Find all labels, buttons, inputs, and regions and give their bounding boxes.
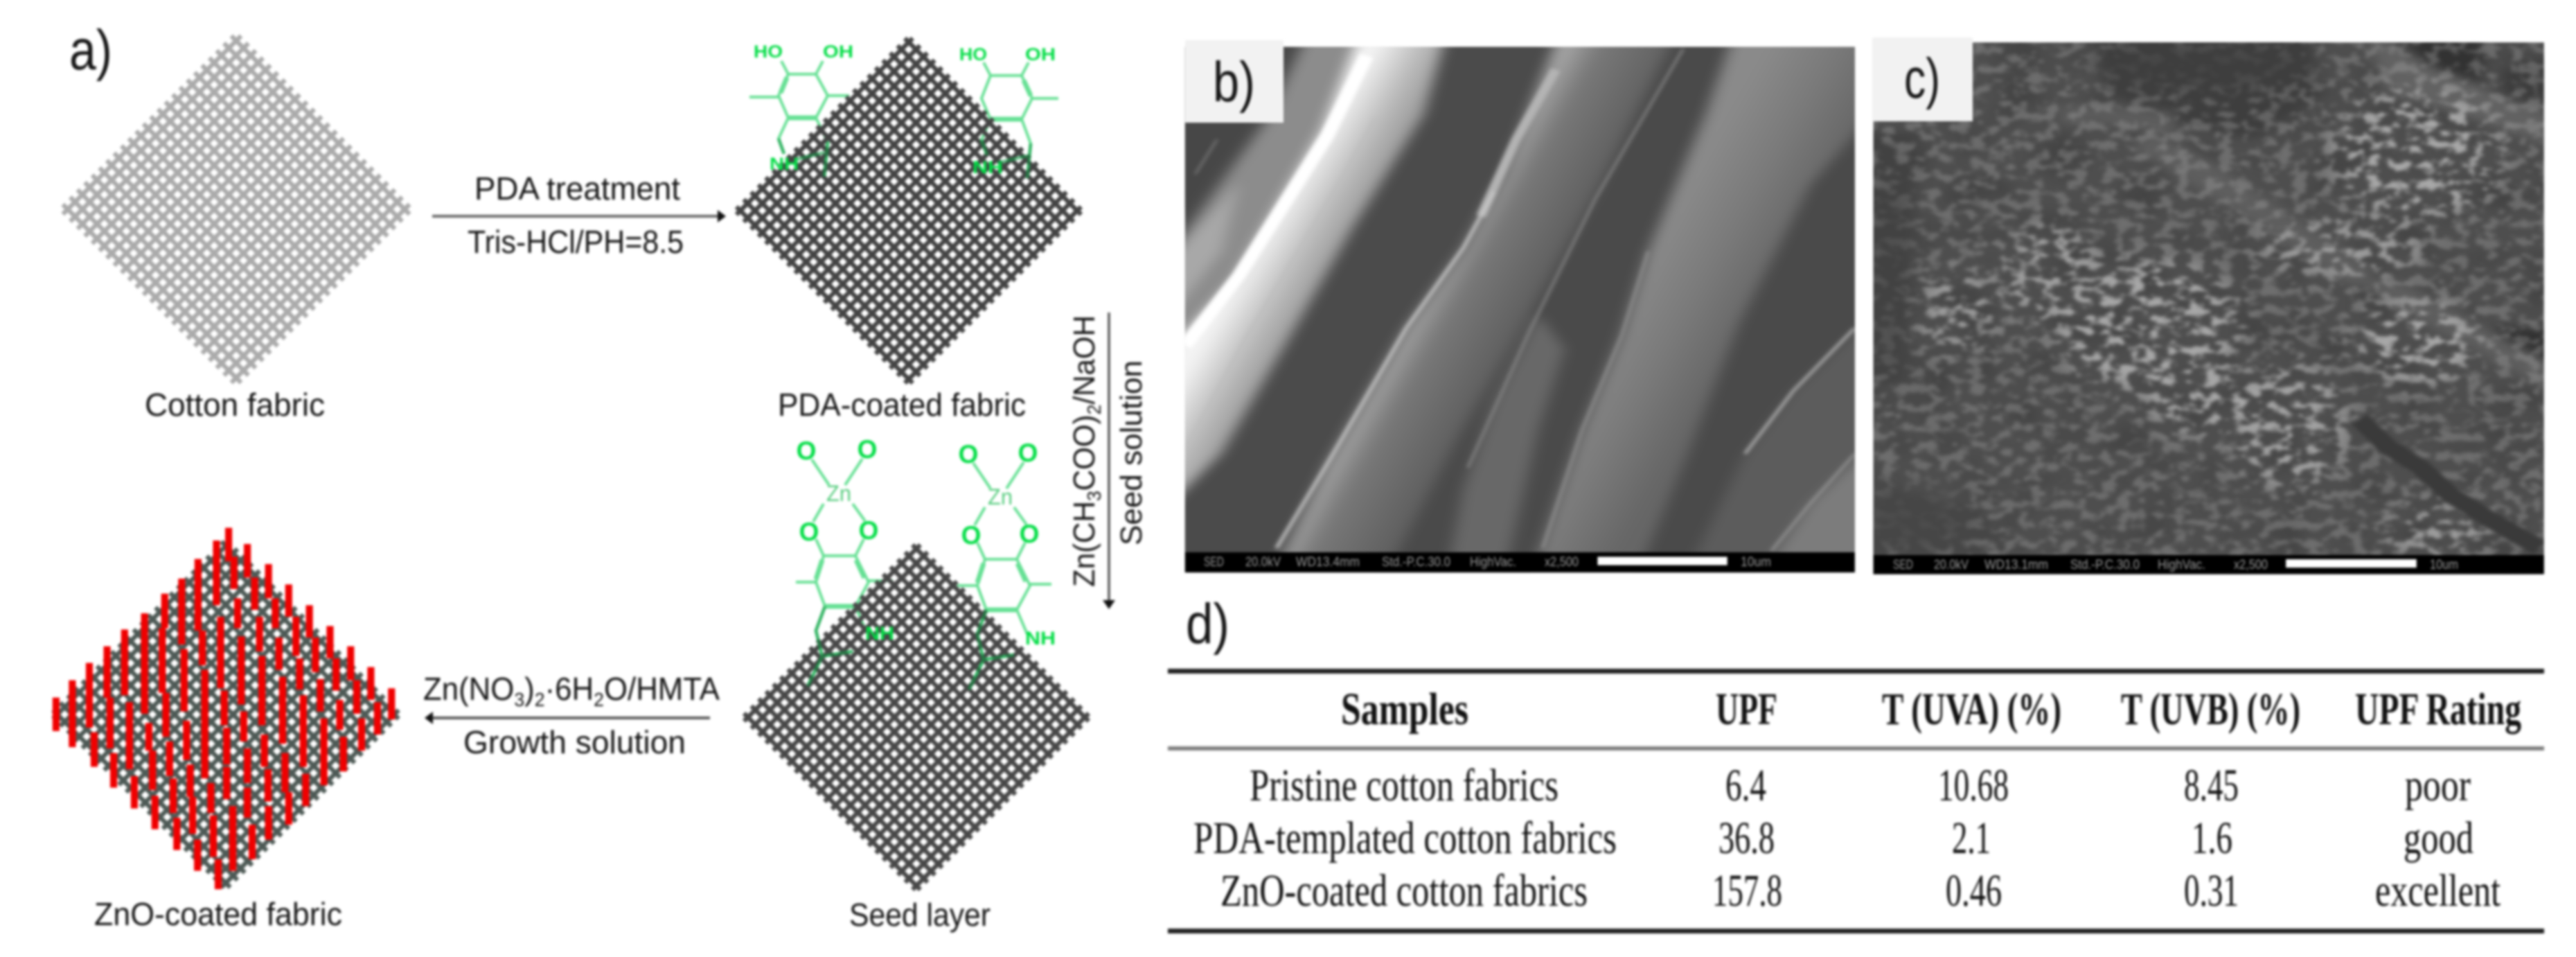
table row: pristine cotton fabrics: Pristine cotton fabrics xyxy=(1250,760,1558,811)
text: Zn(NO3)2 6H2O/HMTA: O/HMTA xyxy=(604,671,720,707)
arrow: seed solution step xyxy=(1103,313,1115,609)
arrow: PDA treatment xyxy=(432,210,726,222)
text: Zn(CH3COO)2/NaOH: COO) xyxy=(1067,414,1101,491)
text: Cotton fabric: Cotton fabric xyxy=(145,387,325,423)
labels: oxygen and zinc atoms: O xyxy=(1020,520,1039,548)
caption text: image c settings: HighVac. xyxy=(2158,558,2205,572)
table row: PDA-templated cotton fabrics xyxy=(1193,813,2473,863)
arrow: growth solution step xyxy=(425,712,710,724)
labels: PDA functional groups: NH xyxy=(770,155,799,174)
caption text: image b settings: 10um xyxy=(1741,555,1771,570)
panel c: SEM image of ZnO-coated fibres xyxy=(1849,28,2570,579)
labels: oxygen and zinc atoms: O xyxy=(1018,439,1038,467)
table row: ZnO-coated cotton fabrics: 157.8 xyxy=(1712,866,1782,916)
labels: oxygen and zinc atoms: O xyxy=(797,437,816,465)
text: Zn(NO3)2 6H2O/HMTA: 3 xyxy=(514,689,524,710)
text: PDA-coated fabric: PDA-coated fabric xyxy=(778,387,1026,423)
text: ZnO-coated fabric: ZnO-coated fabric xyxy=(94,896,342,932)
text: Zn(NO3)2 6H2O/HMTA: ) xyxy=(524,671,535,707)
labels: oxygen and zinc atoms: Zn xyxy=(988,484,1013,509)
labels: oxygen and zinc atoms: O xyxy=(858,435,877,464)
labels: NH groups on seed layer: NH xyxy=(1025,628,1056,649)
scale bar xyxy=(2286,559,2417,568)
table row: PDA-templated cotton fabrics: 36.8 xyxy=(1718,813,1775,863)
caption text: image c settings xyxy=(1893,558,2458,572)
panel b: SEM image of pristine cotton fibres xyxy=(1183,44,1857,575)
table header row: T (UVA) (%) xyxy=(1882,684,2061,735)
table row: pristine cotton fabrics: 10.68 xyxy=(1938,760,2009,811)
caption text: image c settings: 10um xyxy=(2430,558,2458,572)
caption text: image b settings: SED xyxy=(1204,555,1224,570)
table row: PDA-templated cotton fabrics: 2.1 xyxy=(1952,813,1991,863)
scale bar xyxy=(1597,556,1727,565)
icon: ZnO-coated fabric mesh with red nanorods xyxy=(56,528,391,889)
caption text: image c settings: x2,500 xyxy=(2234,558,2268,572)
labels: PDA functional groups: OH xyxy=(823,42,853,62)
table row: ZnO-coated cotton fabrics xyxy=(1220,866,2501,916)
image: smooth cotton fibres xyxy=(1183,44,1857,572)
label box c): c) xyxy=(1904,47,1940,110)
table header row xyxy=(1341,684,2521,735)
labels: oxygen and zinc atoms: O xyxy=(959,440,978,468)
text: Zn(NO3)2 6H2O/HMTA: ·6H xyxy=(545,671,594,707)
caption text: image c settings: WD13.1mm xyxy=(1984,558,2048,572)
table row: PDA-templated cotton fabrics: good xyxy=(2404,813,2473,863)
label box b) xyxy=(1185,40,1283,123)
caption text: image b settings: WD13.4mm xyxy=(1296,555,1360,570)
labels: NH groups on seed layer xyxy=(808,606,1056,690)
panel a: fabric coating process scheme xyxy=(56,19,1148,933)
text: PDA treatment: PDA treatment xyxy=(474,170,680,207)
table rules xyxy=(1168,669,2544,933)
label a): a) xyxy=(69,19,112,82)
label box c) xyxy=(1872,37,1973,121)
labels: PDA functional groups: OH xyxy=(1025,45,1056,64)
table header row: UPF xyxy=(1716,684,1777,735)
labels: PDA functional groups xyxy=(754,42,1056,178)
table row: pristine cotton fabrics: 6.4 xyxy=(1725,760,1766,811)
table row: ZnO-coated cotton fabrics: 0.46 xyxy=(1946,866,2002,916)
caption text: image b settings xyxy=(1204,555,1771,570)
labels: oxygen and zinc atoms xyxy=(797,435,1039,550)
scale information bar xyxy=(1874,555,2544,574)
text: Tris-HCl/PH=8.5: Tris-HCl/PH=8.5 xyxy=(468,224,684,260)
labels: oxygen and zinc atoms: O xyxy=(859,516,878,545)
table row: ZnO-coated cotton fabrics: 0.31 xyxy=(2184,866,2239,916)
text: Zn(CH3COO)2/NaOH: 3 xyxy=(1083,491,1105,501)
caption text: image c settings: SED xyxy=(1893,558,1913,572)
table row: PDA-templated cotton fabrics: 1.6 xyxy=(2192,813,2232,863)
table row: pristine cotton fabrics: poor xyxy=(2405,760,2471,811)
text: Zn(CH3COO)2/NaOH: Zn(CH xyxy=(1067,497,1101,587)
table row: pristine cotton fabrics xyxy=(1250,760,2471,811)
caption text: image b settings: 20.0kV xyxy=(1245,555,1281,570)
labels: PDA functional groups: NH xyxy=(972,158,1003,177)
label box b): b) xyxy=(1213,51,1255,114)
caption text: image b settings: Std.-P.C.30.0 xyxy=(1382,555,1450,570)
icon: seed layer dark mesh xyxy=(830,631,1002,803)
icon: PDA-coated fabric dark mesh xyxy=(823,125,995,297)
panel d: UPF results table xyxy=(1168,669,2544,933)
text: Seed layer: Seed layer xyxy=(849,897,991,933)
text: Seed solution: Seed solution xyxy=(1114,360,1148,545)
labels: oxygen and zinc atoms: O xyxy=(961,521,981,550)
table row: ZnO-coated cotton fabrics: excellent xyxy=(2375,866,2501,916)
labels: NH groups on seed layer: NH xyxy=(865,623,894,644)
table header row: T (UVB) (%) xyxy=(2121,684,2300,735)
text: Growth solution: Growth solution xyxy=(463,724,686,760)
text: Zn(CH3COO)2/NaOH: 2 xyxy=(1083,405,1105,414)
table row: ZnO-coated cotton fabrics: ZnO-coated cotton fabrics xyxy=(1220,866,1588,916)
text: Zn(NO3)2 6H2O/HMTA: 2 xyxy=(535,689,545,710)
labels: oxygen and zinc atoms: Zn xyxy=(826,481,851,506)
label d): d) xyxy=(1186,592,1229,656)
icon: PDA molecules behind coated fabric xyxy=(749,61,1058,178)
caption text: image c settings: 20.0kV xyxy=(1934,558,1969,572)
image: ZnO particles on fibres xyxy=(1872,40,2546,557)
scale information bar xyxy=(1185,552,1855,572)
text: Zn(NO3)2 6H2O/HMTA: Zn(NO xyxy=(423,671,519,707)
caption text: image c settings: Std.-P.C.30.0 xyxy=(2070,558,2140,572)
table row: pristine cotton fabrics: 8.45 xyxy=(2184,760,2239,811)
table header row: Samples xyxy=(1341,684,1468,735)
labels: PDA functional groups: HO xyxy=(959,45,987,64)
icon: cotton fabric grey mesh xyxy=(150,123,322,295)
icon: zinc-bound molecules behind seed layer xyxy=(796,459,1051,690)
table row: PDA-templated cotton fabrics: PDA-templated cotton fabrics xyxy=(1193,813,1617,863)
caption text: image b settings: x2,500 xyxy=(1545,555,1579,570)
text: Zn(NO3)2 6H2O/HMTA: 2 xyxy=(594,689,604,710)
labels: oxygen and zinc atoms: O xyxy=(799,518,819,546)
text: Zn(CH3COO)2/NaOH: /NaOH xyxy=(1067,315,1101,405)
labels: PDA functional groups: HO xyxy=(754,42,783,62)
caption text: image b settings: HighVac. xyxy=(1470,555,1516,570)
